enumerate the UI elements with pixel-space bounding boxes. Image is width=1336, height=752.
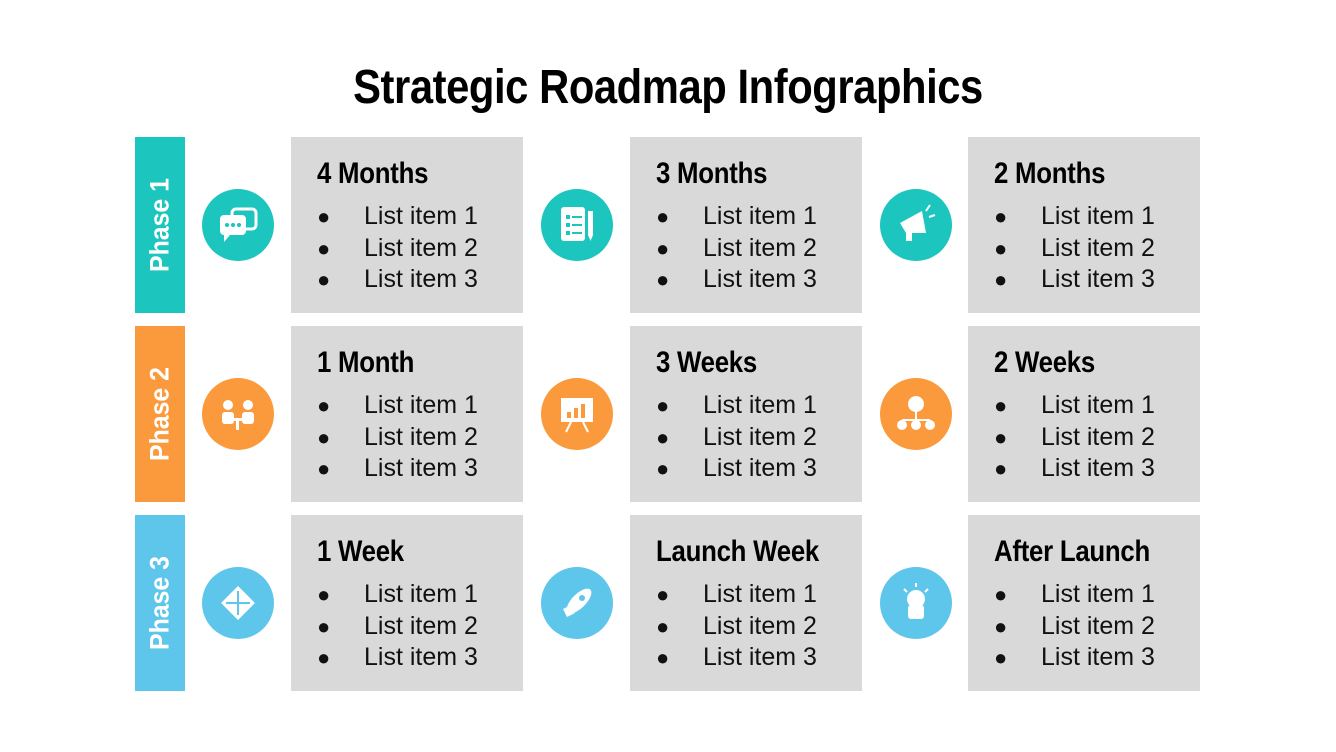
panel: 1 Month: 1 Month [317,346,414,379]
panel: 2 Weeks: List item 1 [1041,391,1155,419]
panel: 2 Weeks: ● [994,393,1007,418]
panel: After Launch: ● [994,645,1007,670]
panel: 3 Months: ● [656,236,669,260]
panel: 4 Months [291,137,523,313]
panel: 2 Weeks [968,326,1200,502]
panel: 3 Weeks: ● [656,456,669,481]
panel: After Launch: ● [994,614,1007,638]
panel: 2 Months: List item 2 [1041,234,1155,262]
icon: idea hand [880,567,952,639]
panel: 3 Weeks: List item 1 [703,391,817,419]
panel: Launch Week: ● [656,614,669,638]
panel: 4 Months: List item 3 [364,265,478,293]
panel: After Launch: List item 2 [1041,612,1155,640]
panel: 2 Months: 2 Months [994,157,1105,190]
panel: Launch Week: List item 3 [703,643,817,671]
panel: 2 Months: ● [994,267,1007,292]
panel: 1 Month: ● [317,393,330,418]
panel: After Launch: ● [994,582,1007,607]
panel: 4 Months: List item 1 [364,202,478,230]
panel: 3 Months: 3 Months [656,157,767,190]
panel: 1 Month: ● [317,424,330,450]
panel: 3 Weeks: 3 Weeks [656,346,757,379]
panel: Launch Week: List item 2 [703,612,817,640]
title: Strategic Roadmap Infographics [353,61,983,114]
panel: 1 Week: ● [317,614,330,638]
panel: 2 Months [968,137,1200,313]
panel: 4 Months: ● [317,267,330,292]
panel: 3 Months: ● [656,267,669,292]
panel: After Launch: List item 1 [1041,580,1155,608]
panel: 4 Months: List item 2 [364,234,478,262]
panel: Launch Week: ● [656,582,669,607]
panel: 3 Months: ● [656,204,669,229]
panel: Launch Week: List item 1 [703,580,817,608]
icon: clipboard [541,189,613,261]
panel: 2 Weeks: 2 Weeks [994,346,1095,379]
icon: rocket [541,567,613,639]
panel: 2 Weeks: ● [994,456,1007,481]
panel: After Launch: List item 3 [1041,643,1155,671]
panel: 2 Weeks: List item 2 [1041,422,1155,450]
panel: 2 Months: List item 3 [1041,265,1155,293]
panel: 1 Month: ● [317,456,330,481]
panel: 1 Week: List item 2 [364,612,478,640]
panel: 1 Month [291,326,523,502]
panel: 2 Months: ● [994,236,1007,260]
icon: hierarchy [880,378,952,450]
panel: 2 Weeks: List item 3 [1041,454,1155,482]
icon: chat bubbles [202,189,274,261]
panel: After Launch: After Launch [994,535,1150,568]
panel: 3 Months [630,137,862,313]
icon: puzzle [202,567,274,639]
phase 2 bar: Phase 2 [144,367,174,461]
icon: meeting [202,378,274,450]
panel: Launch Week: ● [656,645,669,670]
panel: 2 Months: List item 1 [1041,202,1155,230]
panel: 1 Month: List item 3 [364,454,478,482]
phase 3 bar [135,515,185,691]
panel: 3 Weeks: List item 2 [703,422,817,450]
panel: 2 Months: ● [994,204,1007,229]
icon: presentation board [541,378,613,450]
panel: 1 Week: ● [317,645,330,670]
panel: 4 Months: ● [317,204,330,229]
panel: 3 Months: List item 1 [703,202,817,230]
panel: 1 Week: 1 Week [317,535,404,568]
phase 3 bar: Phase 3 [144,556,174,650]
icon: megaphone [880,189,952,261]
panel: 3 Weeks [630,326,862,502]
phase 1 bar [135,137,185,313]
panel: After Launch [968,515,1200,691]
panel: 3 Months: List item 2 [703,234,817,262]
panel: 4 Months: ● [317,236,330,260]
panel: Launch Week [630,515,862,691]
phase 2 bar [135,326,185,502]
panel: 1 Week: List item 1 [364,580,478,608]
panel: 1 Month: List item 1 [364,391,478,419]
phase 1 bar: Phase 1 [144,178,174,272]
panel: 3 Weeks: List item 3 [703,454,817,482]
panel: 3 Months: List item 3 [703,265,817,293]
panel: Launch Week: Launch Week [656,535,819,568]
panel: 3 Weeks: ● [656,424,669,450]
panel: 2 Weeks: ● [994,424,1007,450]
panel: 1 Week: ● [317,582,330,607]
panel: 1 Month: List item 2 [364,422,478,450]
panel: 4 Months: 4 Months [317,157,428,190]
panel: 1 Week: List item 3 [364,643,478,671]
panel: 1 Week [291,515,523,691]
panel: 3 Weeks: ● [656,393,669,418]
